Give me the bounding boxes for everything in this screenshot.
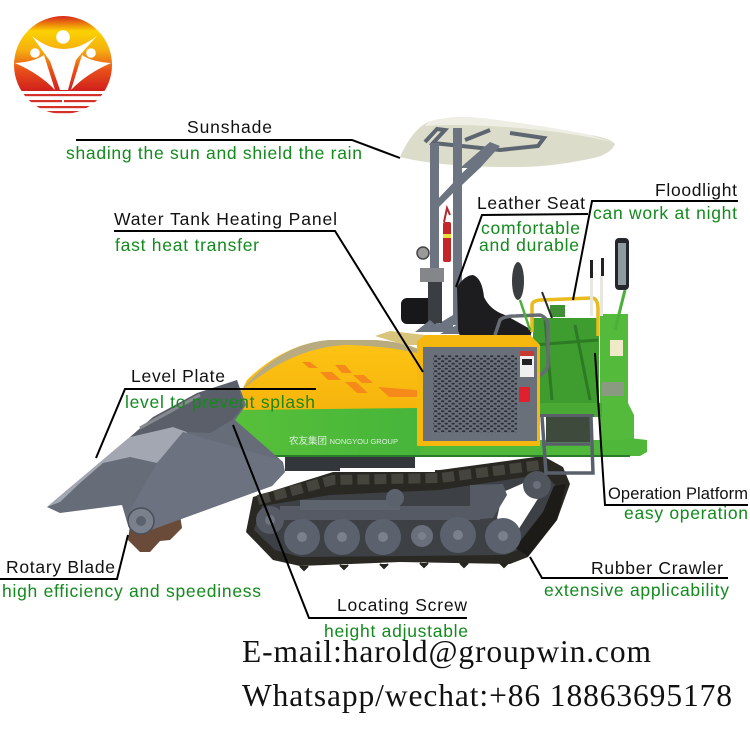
label: Sunshade: shading the sun and shield the rain	[66, 143, 362, 163]
label: Floodlight	[593, 180, 737, 223]
label: Floodlight: Floodlight	[655, 180, 737, 200]
logo	[14, 16, 112, 113]
rotary blade	[128, 515, 182, 552]
brand text on body: 农友集团 NONGYOU GROUP	[289, 435, 398, 447]
leather seat	[457, 275, 532, 338]
label: Operation Platform: easy operation	[624, 503, 748, 523]
sunshade canopy	[400, 117, 615, 168]
canopy frame posts	[425, 130, 515, 334]
label: Water Tank Heating Panel: fast heat transfer	[115, 235, 259, 255]
label: Locating Screw: height adjustable	[324, 621, 468, 641]
contact: whatsapp and wechat: Whatsapp/wechat:+86 18863695178	[242, 678, 732, 713]
access steps	[540, 414, 594, 473]
label: Level Plate	[125, 366, 315, 412]
water tank heating panel cabinet	[417, 335, 540, 446]
label: Rubber Crawler: extensive applicability	[544, 580, 729, 600]
label: Level Plate: level to prevent splash	[125, 392, 315, 412]
level plate and rotary cover	[47, 380, 285, 534]
label: Water Tank Heating Panel: Water Tank Heating Panel	[114, 209, 337, 229]
label: Sunshade	[66, 117, 362, 163]
label: Locating Screw	[324, 595, 468, 641]
label: Rubber Crawler	[544, 558, 729, 600]
label: Floodlight: can work at night	[593, 203, 737, 223]
mirrors	[512, 238, 629, 330]
crawler frame and wheels	[256, 471, 551, 555]
label: Level Plate: Level Plate	[131, 366, 225, 386]
leader lines	[0, 140, 748, 618]
label: Rotary Blade: high efficiency and speediness	[2, 581, 261, 601]
label: Operation Platform: Operation Platform	[608, 485, 748, 503]
fire extinguisher	[443, 208, 451, 262]
green body band	[230, 403, 630, 457]
engine and air filter	[401, 247, 444, 332]
label: Leather Seat: and durable	[479, 235, 579, 255]
contact: email: E-mail:harold@groupwin.com	[242, 634, 651, 669]
label: Leather Seat	[477, 193, 585, 255]
machine illustration: crawler rotary tiller	[47, 117, 647, 570]
label: Water Tank Heating Panel	[114, 209, 337, 255]
engine hood	[232, 331, 425, 411]
rubber crawler track	[246, 456, 570, 570]
levers	[590, 258, 604, 316]
label: Rotary Blade	[2, 557, 261, 601]
label: Rotary Blade: Rotary Blade	[6, 557, 115, 577]
label: Operation Platform	[608, 485, 748, 523]
label: Sunshade: Sunshade	[187, 117, 272, 137]
label: Leather Seat: Leather Seat	[477, 193, 585, 213]
label: Locating Screw: Locating Screw	[337, 595, 467, 615]
label: Leather Seat: comfortable	[481, 218, 580, 238]
operation platform and green housing	[495, 292, 647, 456]
label: Rubber Crawler: Rubber Crawler	[591, 558, 723, 578]
